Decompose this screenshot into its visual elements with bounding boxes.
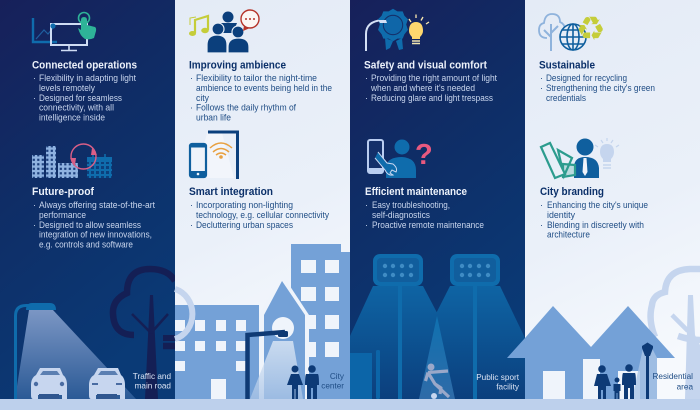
text: future-proof bullets: · bbox=[33, 200, 36, 210]
illustration: building continuation bbox=[350, 350, 380, 399]
panel: traffic and main road bbox=[0, 0, 175, 410]
text: city branding bullets: · bbox=[540, 200, 543, 210]
label: public sport facility bbox=[476, 373, 520, 392]
icon: sustainable bbox=[539, 9, 606, 51]
label: city center: center bbox=[321, 382, 344, 390]
label: residential area: area bbox=[677, 382, 693, 392]
text: connected operations bullets: · bbox=[33, 93, 36, 103]
illustration: pale tree bbox=[651, 269, 700, 399]
text: safety bullets: · bbox=[365, 73, 368, 83]
illustration: pale tree canopy edge bbox=[175, 289, 192, 339]
illustration: street light bbox=[16, 303, 56, 399]
illustration: tree bbox=[113, 269, 175, 399]
illustration: left building bbox=[175, 305, 259, 399]
text: smart integration bullets: Incorporating non-lighting bbox=[196, 200, 293, 210]
illustration: light beam bbox=[15, 310, 136, 399]
illustration: tall building bbox=[291, 244, 350, 399]
icon: connected operations bbox=[33, 12, 96, 50]
heading: future-proof: Future-proof bbox=[32, 186, 94, 198]
text: smart integration bullets: technology, e.g. cellular connectivity bbox=[196, 210, 329, 220]
heading: smart integration: Smart integration bbox=[189, 186, 273, 198]
label: residential area bbox=[652, 372, 693, 392]
text: future-proof bullets: Designed to allow seamless bbox=[39, 220, 141, 230]
text: smart integration bullets: Decluttering urban spaces bbox=[196, 220, 293, 230]
text: improving ambience bullets: urban life bbox=[196, 112, 231, 122]
text: future-proof bullets: Always offering state-of-the-art bbox=[39, 200, 155, 210]
text: future-proof bullets: integration of new innovations, bbox=[39, 230, 152, 240]
text: city branding bullets bbox=[540, 200, 648, 240]
text: smart integration bullets: · bbox=[190, 220, 193, 230]
text: maintenance bullets: Proactive remote maintenance bbox=[372, 220, 484, 230]
panel: public sport facility bbox=[350, 0, 525, 410]
text: safety bullets: · bbox=[365, 93, 368, 103]
icon: safety and visual comfort bbox=[366, 9, 429, 51]
illustration: car front left bbox=[31, 368, 67, 399]
text: connected operations bullets: levels remotely bbox=[39, 83, 95, 93]
label: public sport facility: Public sport bbox=[476, 373, 520, 382]
ground strip bbox=[0, 399, 700, 410]
text: improving ambience bullets: Flexibility to tailor the night-time bbox=[196, 73, 317, 83]
heading: efficient maintenance: Efficient maintenance bbox=[365, 186, 467, 198]
text: sustainable bullets: Strengthening the city's green bbox=[546, 83, 655, 93]
text: connected operations bullets bbox=[33, 73, 136, 122]
panel: city center bbox=[175, 0, 350, 410]
illustration: roof edge bbox=[507, 338, 525, 358]
text: safety bullets: when and where it's needed bbox=[370, 83, 475, 93]
text: maintenance bullets: self-diagnostics bbox=[372, 210, 430, 220]
label: residential area: Residential bbox=[652, 372, 693, 381]
label: city center bbox=[321, 372, 345, 390]
text: connected operations bullets: intelligence inside bbox=[39, 112, 105, 122]
text: improving ambience bullets: Follows the daily rhythm of bbox=[196, 102, 296, 112]
heading: city branding: City branding bbox=[540, 186, 604, 198]
text: sustainable bullets: Designed for recycling bbox=[546, 73, 627, 83]
text: city branding bullets: Blending in discreetly with bbox=[547, 220, 644, 230]
illustration: floodlight left bbox=[373, 254, 423, 399]
icon: question mark: ? bbox=[415, 139, 433, 171]
label: public sport facility: facility bbox=[496, 382, 520, 392]
text: sustainable bullets: · bbox=[540, 73, 543, 83]
text: improving ambience bullets bbox=[190, 73, 332, 122]
text: city branding bullets: architecture bbox=[547, 230, 590, 240]
text: connected operations bullets: Flexibility in adapting light bbox=[39, 73, 136, 83]
text: safety bullets bbox=[365, 73, 497, 103]
text: future-proof bullets bbox=[33, 200, 155, 250]
illustration: houses bbox=[525, 306, 675, 399]
text: future-proof bullets: · bbox=[33, 220, 36, 230]
label: traffic and main road bbox=[133, 372, 171, 390]
illustration: floodlight right bbox=[450, 254, 500, 399]
illustration: football player bbox=[426, 364, 449, 399]
text: city branding bullets: identity bbox=[547, 210, 575, 220]
text: connected operations bullets: · bbox=[33, 73, 36, 83]
text: improving ambience bullets: ambience to events being held in the bbox=[196, 83, 332, 93]
text: improving ambience bullets: city bbox=[196, 93, 209, 103]
illustration: pointed building bbox=[250, 274, 309, 399]
heading: sustainable: Sustainable bbox=[539, 60, 595, 72]
text: future-proof bullets: e.g. controls and software bbox=[39, 240, 133, 250]
heading: improving ambience: Improving ambience bbox=[189, 60, 286, 72]
icon: improving ambience bbox=[189, 10, 259, 53]
label: traffic and main road: main road bbox=[135, 382, 171, 390]
text: maintenance bullets: · bbox=[365, 200, 368, 210]
text: improving ambience bullets: · bbox=[190, 73, 193, 83]
text: maintenance bullets: Easy troubleshooting, bbox=[372, 200, 450, 210]
panel: residential area bbox=[525, 0, 700, 410]
illustration: lantern street light bbox=[642, 342, 653, 399]
text: maintenance bullets bbox=[365, 200, 484, 230]
icon: efficient maintenance bbox=[368, 140, 416, 178]
text: smart integration bullets bbox=[190, 200, 329, 230]
illustration: couple bbox=[287, 365, 319, 399]
text: smart integration bullets: · bbox=[190, 200, 193, 210]
illustration: city street light bbox=[248, 331, 288, 399]
heading: safety and visual comfort: Safety and visual comfort bbox=[364, 60, 487, 72]
text: safety bullets: Reducing glare and light trespass bbox=[371, 93, 493, 103]
text: sustainable bullets: credentials bbox=[546, 93, 586, 103]
text: safety bullets: Providing the right amount of light bbox=[371, 73, 497, 83]
icon: future-proof buildings and calendar bbox=[32, 144, 112, 178]
icon: smart integration bbox=[190, 132, 238, 179]
text: sustainable bullets: · bbox=[540, 83, 543, 93]
text: city branding bullets: Enhancing the city's unique bbox=[547, 200, 648, 210]
illustration: family bbox=[594, 364, 636, 399]
illustration: floodlight beams bbox=[350, 286, 525, 410]
icon: city branding bbox=[541, 138, 619, 178]
text: sustainable bullets bbox=[540, 73, 655, 103]
heading: connected operations: Connected operations bbox=[32, 60, 137, 72]
text: connected operations bullets: connectivity, with all bbox=[39, 102, 114, 112]
text: maintenance bullets: · bbox=[365, 220, 368, 230]
illustration: car front right bbox=[89, 368, 125, 399]
label: traffic and main road: Traffic and bbox=[133, 372, 171, 381]
text: future-proof bullets: performance bbox=[39, 210, 86, 220]
icon: sustainable: ♻ bbox=[576, 9, 606, 48]
text: connected operations bullets: Designed for seamless bbox=[39, 93, 122, 103]
text: city branding bullets: · bbox=[540, 220, 543, 230]
label: city center: City bbox=[330, 372, 345, 381]
text: improving ambience bullets: · bbox=[190, 102, 193, 112]
